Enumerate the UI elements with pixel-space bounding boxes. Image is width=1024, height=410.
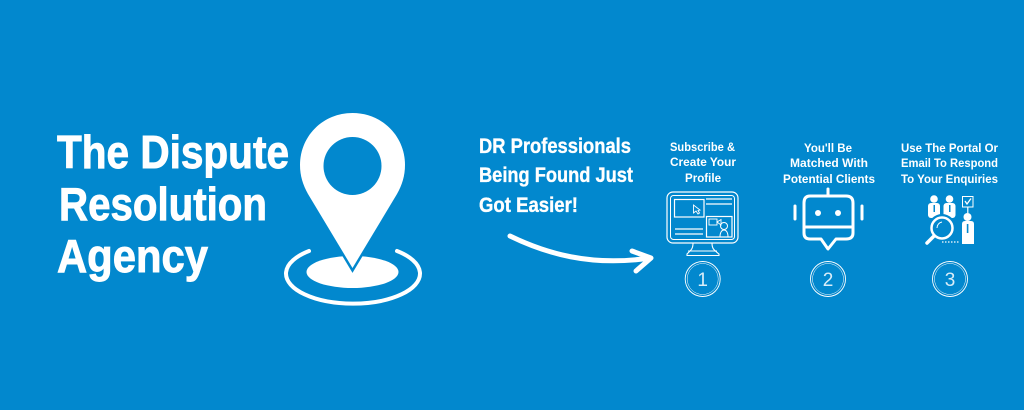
title: Resolution <box>59 178 267 230</box>
step 2 text: You'll Be <box>804 141 852 155</box>
step 2 <box>783 141 875 296</box>
title <box>57 126 289 282</box>
arrow <box>510 236 651 271</box>
step 2 text: Matched With <box>790 156 868 170</box>
step 3 text: Email To Respond <box>901 156 998 170</box>
icon: monitor <box>667 192 738 256</box>
icon: location pin <box>286 113 420 304</box>
icon: people and magnifier <box>927 195 974 244</box>
number 3: 3 <box>945 270 955 291</box>
step 1 <box>667 140 738 296</box>
step 3 text: To Your Enquiries <box>901 172 998 186</box>
number 1: 1 <box>697 270 708 291</box>
step 1 text: Create Your <box>670 155 736 169</box>
step 3 <box>901 141 998 296</box>
tagline: Got Easier! <box>479 194 578 217</box>
title: The Dispute <box>57 126 289 178</box>
step 1 text: Profile <box>685 171 721 185</box>
number 2 <box>810 262 846 296</box>
step 3 text <box>901 141 998 186</box>
step 1 text <box>670 140 736 185</box>
title: Agency <box>57 230 208 282</box>
tagline <box>479 135 633 217</box>
step 2 text <box>783 141 875 186</box>
number 2: 2 <box>823 270 833 291</box>
number 3 <box>932 262 968 296</box>
icon: robot <box>795 189 862 249</box>
step 3 text: Use The Portal Or <box>901 141 998 155</box>
tagline: Being Found Just <box>479 164 633 187</box>
step 2 text: Potential Clients <box>783 172 875 186</box>
number 1 <box>685 262 720 296</box>
step 1 text: Subscribe & <box>670 140 735 154</box>
tagline: DR Professionals <box>479 135 631 158</box>
